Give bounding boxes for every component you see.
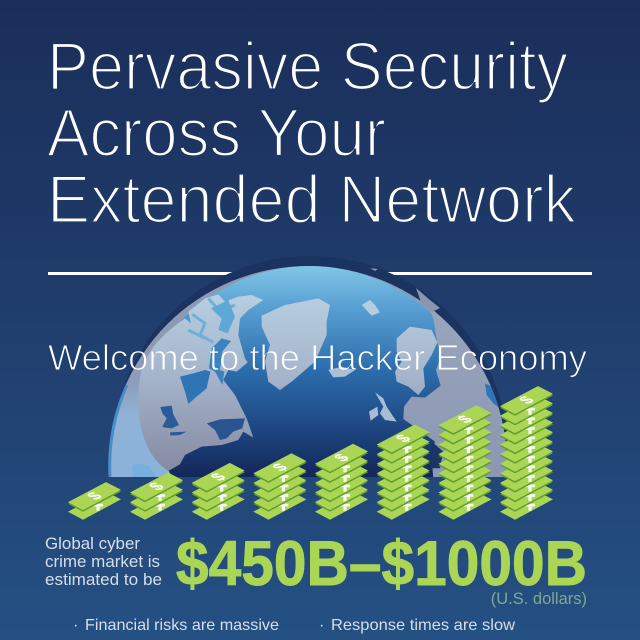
stack 3 bbox=[192, 463, 245, 520]
stack 2 bbox=[130, 472, 183, 520]
title: Extended Network bbox=[47, 162, 577, 238]
headline figure: $450B–$1000B bbox=[176, 529, 587, 599]
infographic canvas: Response times are slow bbox=[331, 617, 515, 634]
stack 7: $ bbox=[454, 413, 477, 426]
money stacks bbox=[68, 386, 553, 520]
stack 2: $ bbox=[146, 481, 169, 493]
bullet: financial risks: · bbox=[73, 617, 78, 634]
stack 6 bbox=[377, 424, 430, 520]
stack 1 bbox=[68, 482, 121, 520]
title bbox=[47, 28, 577, 238]
right hemisphere land bbox=[328, 300, 520, 480]
stack 4 bbox=[253, 453, 306, 520]
stack 8 bbox=[500, 386, 553, 520]
stack 8: $ bbox=[516, 394, 539, 407]
left hemisphere land bbox=[105, 288, 330, 480]
subheading: Welcome to the Hacker Economy bbox=[48, 337, 587, 378]
stack 3: $ bbox=[207, 471, 231, 483]
stack 5: $ bbox=[331, 452, 354, 464]
market intro text: Global cyber bbox=[45, 535, 141, 553]
market intro text: estimated to be bbox=[45, 571, 162, 589]
infographic canvas: Financial risks are massive bbox=[85, 617, 279, 634]
title: Pervasive Security bbox=[47, 28, 568, 104]
stack 5 bbox=[315, 444, 368, 520]
market intro text bbox=[45, 535, 162, 589]
divider rule bbox=[48, 272, 592, 275]
stack 6: $ bbox=[392, 433, 416, 445]
far-side islands on dark rim bbox=[370, 268, 440, 312]
lower-left rim highlight bbox=[110, 385, 127, 477]
stack 7 bbox=[438, 405, 491, 520]
stack 4: $ bbox=[269, 461, 292, 474]
stack 1: $ bbox=[84, 490, 107, 503]
market intro text: crime market is bbox=[45, 553, 160, 571]
currency note: (U.S. dollars) bbox=[491, 590, 587, 608]
bullet: response times: · bbox=[319, 617, 324, 634]
illustration: globe bbox=[108, 256, 508, 477]
title: Across Your bbox=[47, 95, 386, 171]
